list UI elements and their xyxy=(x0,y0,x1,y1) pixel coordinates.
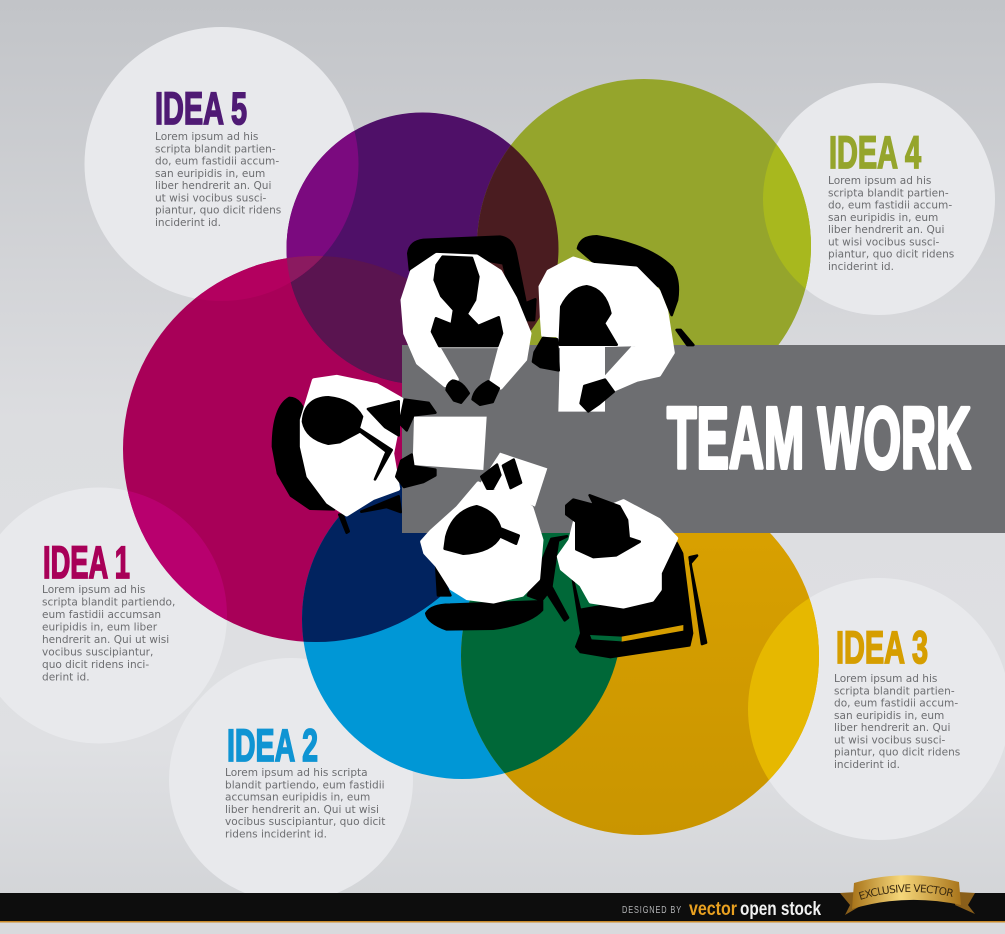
idea 1: hendrerit an. Qui ut wisi xyxy=(42,634,169,646)
idea 3: IDEA 3 xyxy=(836,622,928,673)
idea 3: scripta blandit partien- xyxy=(834,685,955,697)
idea 3: liber hendrerit an. Qui xyxy=(834,722,950,734)
person: top right xyxy=(533,236,693,412)
idea 5: scripta blandit partien- xyxy=(155,143,276,155)
idea 5: inciderint id. xyxy=(155,217,221,229)
badge: exclusive vector: EXCLUSIVE VECTOR xyxy=(858,884,953,900)
idea 3: do, eum fastidii accum- xyxy=(834,698,958,710)
idea 2: liber hendrerit an. Qui ut wisi xyxy=(225,804,379,816)
footer bar: vector xyxy=(689,899,738,920)
idea 5: Lorem ipsum ad his xyxy=(155,131,258,143)
idea 1: euripidis in, eum liber xyxy=(42,622,158,634)
idea 4: san euripidis in, eum xyxy=(828,212,938,224)
idea 1: vocibus suscipiantur, xyxy=(42,646,153,658)
grey title band xyxy=(402,345,1005,533)
idea 3: inciderint id. xyxy=(834,759,900,771)
person: bottom centre xyxy=(422,453,568,629)
idea 5 xyxy=(155,83,281,229)
idea 5: IDEA 5 xyxy=(155,83,247,134)
idea 5: piantur, quo dicit ridens xyxy=(155,204,281,216)
idea 1: quo dicit ridens inci- xyxy=(42,659,149,671)
idea 1: derint id. xyxy=(42,672,90,684)
idea 4: IDEA 4 xyxy=(829,127,921,178)
idea 3: Lorem ipsum ad his xyxy=(834,673,937,685)
person: top left xyxy=(403,237,535,405)
person: bottom right xyxy=(559,495,706,657)
idea 1: IDEA 1 xyxy=(43,537,130,588)
idea 4: Lorem ipsum ad his xyxy=(828,175,931,187)
idea 4: inciderint id. xyxy=(828,261,894,273)
idea 2: vocibus suscipiantur, quo dicit xyxy=(225,816,385,828)
overlapping colour circles xyxy=(123,79,819,835)
idea 2: blandit partiendo, eum fastidii xyxy=(225,779,385,791)
footer bar: DESIGNED BY xyxy=(622,905,682,916)
idea 5: do, eum fastidii accum- xyxy=(155,156,279,168)
idea 4: liber hendrerit an. Qui xyxy=(828,224,944,236)
footer bar xyxy=(0,893,1005,934)
footer bar: open stock xyxy=(740,899,821,920)
idea 2: IDEA 2 xyxy=(227,720,318,771)
idea 3: san euripidis in, eum xyxy=(834,710,944,722)
idea 5: ut wisi vocibus susci- xyxy=(155,192,267,204)
idea 4 xyxy=(828,127,954,273)
idea 5: san euripidis in, eum xyxy=(155,168,265,180)
person: left xyxy=(273,377,487,533)
idea 5: liber hendrerit an. Qui xyxy=(155,180,271,192)
idea 1: Lorem ipsum ad his xyxy=(42,584,145,596)
idea 4: ut wisi vocibus susci- xyxy=(828,236,940,248)
idea 2: accumsan euripidis in, eum xyxy=(225,792,370,804)
idea 2: Lorem ipsum ad his scripta xyxy=(225,767,368,779)
idea 3: piantur, quo dicit ridens xyxy=(834,746,960,758)
idea 4: scripta blandit partien- xyxy=(828,187,949,199)
idea 4: piantur, quo dicit ridens xyxy=(828,248,954,260)
idea 1: eum fastidii accumsan xyxy=(42,609,161,621)
idea 1 xyxy=(42,537,175,684)
idea 3: ut wisi vocibus susci- xyxy=(834,734,946,746)
idea 4: do, eum fastidii accum- xyxy=(828,200,952,212)
team seen from above xyxy=(273,236,706,657)
idea 2: ridens inciderint id. xyxy=(225,828,327,840)
badge: exclusive vector xyxy=(840,875,975,915)
idea 3 xyxy=(834,622,960,771)
idea 1: scripta blandit partiendo, xyxy=(42,596,175,608)
idea 2 xyxy=(225,720,385,840)
